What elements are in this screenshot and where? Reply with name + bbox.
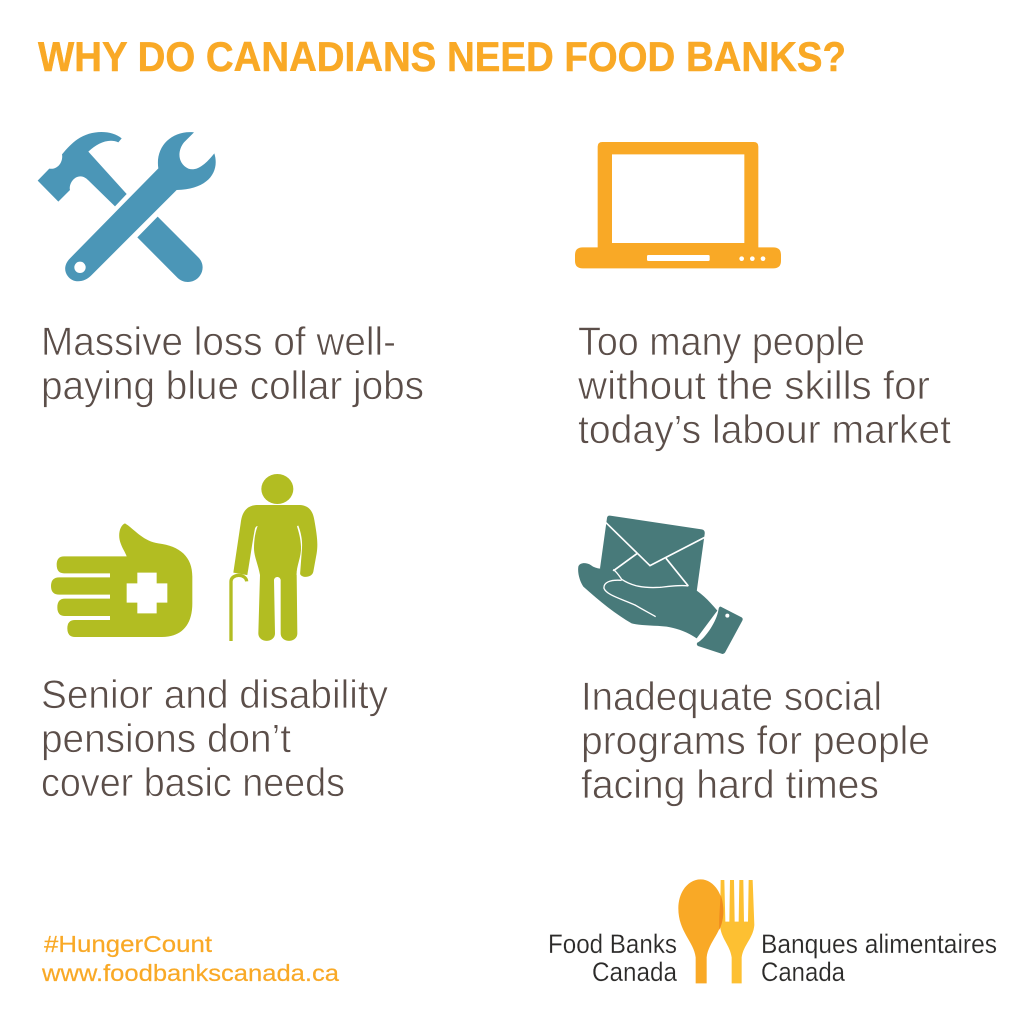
footer hashtag and website	[41, 931, 340, 986]
footer hashtag and website: www.foodbankscanada.ca	[41, 960, 340, 986]
text: logo wordmarks	[548, 929, 997, 987]
text: blue collar jobs	[41, 320, 424, 408]
text: blue collar jobs: Massive loss of well-	[41, 320, 396, 364]
icon: spoon and fork	[678, 879, 754, 983]
text: inadequate social programs: Inadequate social	[581, 675, 882, 719]
text: labour market skills: without the skills for	[577, 364, 930, 408]
icon: laptop	[575, 142, 781, 268]
icon: hammer and wrench	[38, 132, 216, 282]
text: logo wordmarks: Banques alimentaires	[761, 929, 997, 959]
panel: blue collar jobs	[38, 132, 424, 408]
text: labour market skills	[577, 320, 951, 452]
text: inadequate social programs	[581, 675, 930, 807]
text: inadequate social programs: programs for people	[581, 719, 930, 763]
text: logo wordmarks: Food Banks	[548, 929, 677, 959]
text: senior and disability pensions: cover basic needs	[41, 761, 345, 805]
footer hashtag and website: #HungerCount	[44, 931, 213, 957]
text: logo wordmarks: Canada	[592, 957, 677, 987]
panel: senior and disability pensions	[41, 474, 388, 805]
text: senior and disability pensions: Senior and disability	[41, 673, 388, 717]
icon: hand with medical cross	[51, 523, 192, 637]
text: senior and disability pensions: pensions don’t	[41, 717, 291, 761]
title: WHY DO CANADIANS NEED FOOD BANKS?	[38, 33, 846, 80]
logo: Food Banks Canada	[548, 879, 997, 987]
panel: labour market skills	[575, 142, 951, 452]
text: inadequate social programs: facing hard times	[581, 763, 879, 807]
icon: hand holding envelope	[578, 516, 743, 654]
text: senior and disability pensions	[41, 673, 388, 805]
text: labour market skills: Too many people	[578, 320, 865, 364]
panel: inadequate social programs	[578, 516, 930, 807]
text: logo wordmarks: Canada	[761, 957, 845, 987]
icon: senior with cane	[231, 474, 317, 641]
text: labour market skills: today’s labour market	[578, 408, 951, 452]
text: blue collar jobs: paying blue collar jobs	[41, 364, 424, 408]
